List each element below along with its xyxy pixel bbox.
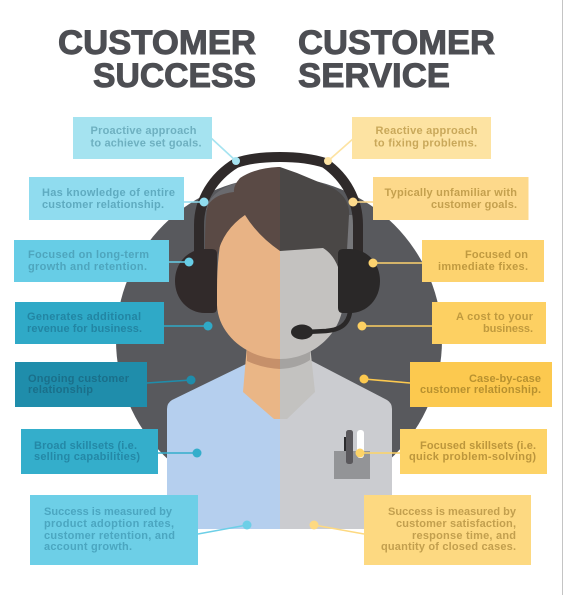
callout: proactive approach: Proactive approach xyxy=(90,125,197,137)
neck shadow right xyxy=(280,345,310,369)
callout: service measures xyxy=(310,495,531,565)
title: customer service: SERVICE xyxy=(298,57,450,95)
title: customer success xyxy=(58,24,256,95)
callout: additional revenue xyxy=(15,302,212,344)
callout: immediate fixes: immediate fixes. xyxy=(438,261,528,273)
callout: a cost to business: A cost to your xyxy=(456,311,534,323)
callout: broad skillsets: selling capabilities) xyxy=(34,451,140,463)
callout: success measures: customer retention, and xyxy=(44,530,175,542)
callout: service measures: Success is measured by xyxy=(388,506,517,518)
white pen xyxy=(357,430,364,458)
callout: proactive approach: to achieve set goals. xyxy=(90,138,202,150)
callout: broad skillsets xyxy=(21,429,202,474)
microphone head xyxy=(291,324,313,340)
callout: ongoing relationship xyxy=(15,362,196,407)
hair right half xyxy=(280,167,351,275)
callout: unfamiliar with goals: customer goals. xyxy=(431,199,517,211)
callout: unfamiliar with goals: Typically unfamiliar with xyxy=(384,187,517,199)
callout: success measures: product adoption rates, xyxy=(44,518,174,530)
callout: proactive approach xyxy=(73,117,240,165)
callout: long-term growth: Focused on long-term xyxy=(28,249,149,261)
face left half xyxy=(217,200,280,359)
neck shadow left xyxy=(247,345,280,369)
callout: service measures: customer satisfaction, xyxy=(396,518,516,530)
callout: reactive approach: to fixing problems. xyxy=(374,138,477,150)
right earcup xyxy=(338,249,380,313)
callout: focused skillsets xyxy=(356,429,547,474)
callout: a cost to business xyxy=(358,302,546,344)
callout: service measures: response time, and xyxy=(412,530,516,542)
callout: success measures: account growth. xyxy=(44,541,132,553)
hair highlight sliver xyxy=(347,215,353,250)
illustration: agent with headset xyxy=(167,157,392,529)
callout: long-term growth xyxy=(14,240,194,282)
pen clip xyxy=(344,437,347,451)
hair left half xyxy=(205,167,280,262)
callout: knowledge of relationship: customer relationship. xyxy=(42,199,164,211)
neck right xyxy=(280,345,315,419)
callout: success measures: Success is measured by xyxy=(44,506,173,518)
title: customer service xyxy=(298,24,495,95)
shirt right half xyxy=(280,360,392,529)
callout: ongoing relationship: Ongoing customer xyxy=(28,373,130,385)
callout: additional revenue: Generates additional xyxy=(27,311,141,323)
callout: unfamiliar with goals xyxy=(348,177,528,220)
callout: focused skillsets: quick problem-solving) xyxy=(409,451,536,463)
callout: reactive approach: Reactive approach xyxy=(376,125,478,137)
callout: broad skillsets: Broad skillsets (i.e. xyxy=(34,440,137,452)
callout: knowledge of relationship: Has knowledge of entire xyxy=(42,187,175,199)
shirt pocket xyxy=(334,451,370,479)
callout: reactive approach xyxy=(324,117,491,165)
callout: immediate fixes xyxy=(368,240,544,282)
callout: success measures xyxy=(30,495,252,565)
title: customer service: CUSTOMER xyxy=(298,24,495,62)
face right half xyxy=(280,200,343,359)
callout: service measures: quantity of closed cases. xyxy=(381,541,516,553)
left earcup xyxy=(175,249,217,313)
callout: case-by-case: Case-by-case xyxy=(469,373,541,385)
callout: case-by-case: customer relationship. xyxy=(420,384,541,396)
shirt left half xyxy=(167,362,280,529)
callout: long-term growth: growth and retention. xyxy=(28,261,147,273)
callout: additional revenue: revenue for business. xyxy=(27,323,142,335)
neck left xyxy=(243,345,280,419)
callout: case-by-case xyxy=(360,362,552,407)
microphone boom xyxy=(306,312,350,332)
title: customer success: SUCCESS xyxy=(93,57,256,95)
background circle xyxy=(116,177,442,503)
callout: knowledge of relationship xyxy=(29,177,208,220)
callout: focused skillsets: Focused skillsets (i.e. xyxy=(420,440,536,452)
callout: a cost to business: business. xyxy=(483,323,533,335)
callout: ongoing relationship: relationship xyxy=(28,384,93,396)
hair back highlight xyxy=(206,183,240,210)
headband xyxy=(199,157,358,258)
dark pen xyxy=(346,430,353,464)
title: customer success: CUSTOMER xyxy=(58,24,256,62)
callout: immediate fixes: Focused on xyxy=(465,249,528,261)
